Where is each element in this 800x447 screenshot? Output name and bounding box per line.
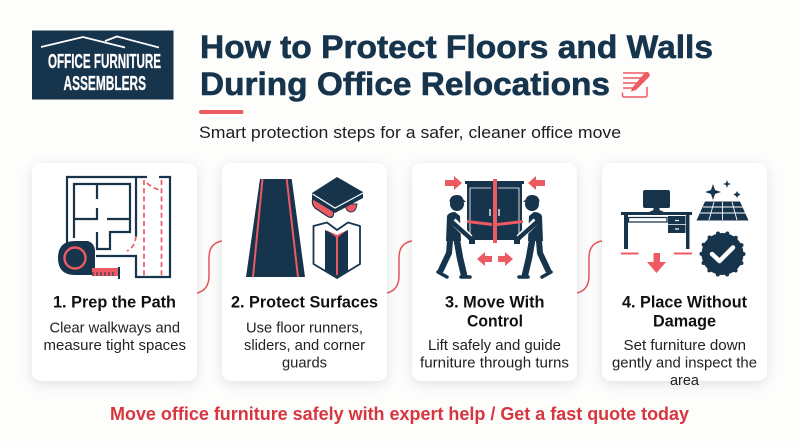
description: furniture through turns [420, 356, 569, 372]
description [420, 338, 569, 372]
logo: Office Furniture Assemblers: OFFICE FURNITURE [48, 50, 161, 73]
description [44, 320, 186, 354]
panel: step 2 protect surfaces [222, 163, 387, 381]
icon: verified badge [702, 233, 744, 275]
heading [445, 294, 544, 330]
description: Set furniture down [624, 338, 746, 354]
heading [622, 294, 747, 330]
mover right [519, 195, 551, 277]
heading: Control [467, 312, 523, 330]
connector: step 3 to 4 [577, 241, 602, 293]
heading: 3. Move With [445, 294, 544, 312]
icon: movers carrying cabinet [438, 176, 551, 277]
heading: 4. Place Without [622, 294, 747, 312]
description: Use floor runners, [246, 320, 363, 336]
panel: step 1 prep the path [32, 163, 197, 381]
title: During Office Relocations [200, 66, 610, 102]
description: area [670, 373, 700, 389]
logo: Office Furniture Assemblers [32, 30, 174, 100]
description: sliders, and corner [244, 338, 365, 354]
accent underline [199, 110, 244, 114]
connector: step 2 to 3 [387, 241, 412, 293]
description [244, 320, 365, 372]
subtitle: Smart protection steps for a safer, cleaner office move [199, 123, 621, 142]
title: How to Protect Floors and Walls [200, 29, 713, 65]
panel: step 3 move with control [412, 163, 577, 381]
icon: furniture slider [312, 177, 363, 218]
icon: floor plan and tape measure [58, 177, 170, 279]
heading: 1. Prep the Path [53, 294, 176, 312]
description: Clear walkways and [50, 320, 180, 336]
description: guards [282, 356, 327, 372]
connector: step 1 to 2 [197, 241, 222, 293]
description: gently and inspect the [612, 356, 757, 372]
panel: step 4 place without damage [602, 163, 767, 389]
icon: clean floor with sparkles [696, 180, 748, 220]
icon: floor runner [246, 179, 305, 277]
mover left [438, 195, 470, 277]
icon: note and pencil [622, 72, 650, 97]
title [200, 29, 713, 102]
heading: 2. Protect Surfaces [231, 294, 378, 312]
logo: Office Furniture Assemblers: ASSEMBLERS [64, 72, 146, 95]
heading: Damage [653, 312, 716, 330]
description: measure tight spaces [44, 338, 186, 354]
icon: desk with monitor [621, 190, 692, 249]
call to action: Move office furniture safely with expert help / Get a fast quote today [110, 403, 690, 424]
icon: placement arrow [621, 253, 692, 273]
description [612, 338, 757, 389]
description: Lift safely and guide [428, 338, 561, 354]
icon: corner guard [314, 222, 360, 278]
